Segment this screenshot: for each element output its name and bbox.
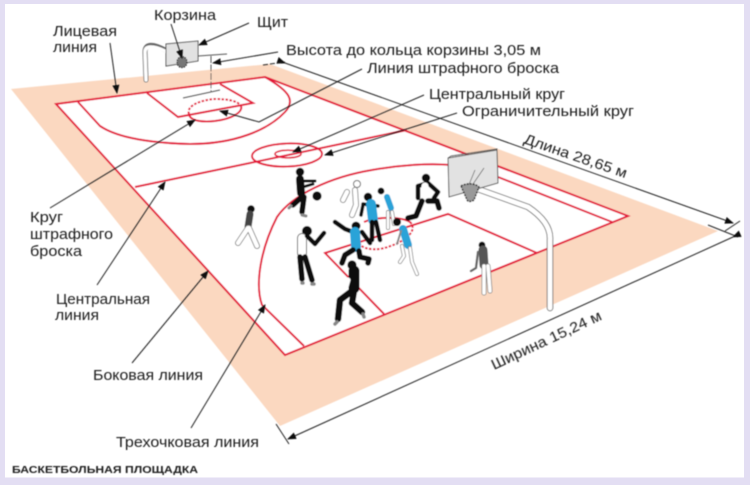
centre line [135,130,407,187]
dimension: length [263,62,740,237]
label: centre line: линия [55,308,99,324]
right net [461,184,479,202]
left restricted key [147,84,253,117]
arrow: backboard [199,23,249,45]
arrow: free throw line [220,69,362,122]
arrow: free throw circle [50,120,195,208]
label: centre line: Центральная [56,292,150,308]
left free throw circle [189,99,241,121]
caption: БАСКЕТБОЛЬНАЯ ПЛОЩАДКА [12,464,198,476]
players [238,168,490,324]
label: free throw circle [30,210,113,260]
left backboard [166,41,198,66]
blue player centre [361,193,380,240]
arrow: basket [171,24,182,58]
centre circle [252,142,322,168]
left pole [145,45,165,80]
blue player right [393,218,417,274]
blue player side [378,188,394,228]
illustration: basketball court [11,41,718,426]
dimension: width [276,237,733,444]
left hoop assembly [145,41,198,80]
label: end line: Лицевая [53,24,117,40]
right pole [475,188,550,308]
right free throw circle [360,218,413,249]
blue player jumping [335,222,370,263]
referee right [471,242,490,293]
label: width: Ширина 15,24 м [489,308,604,374]
arrow: side line [132,271,208,363]
label: hoop height: Высота до кольца корзины 3,05 м [286,43,541,59]
leader lines and arrows [50,23,740,444]
label: restricted circle: Ограничительный круг [462,104,634,120]
arrow: centre line [97,182,165,285]
arrow: three-point line [191,305,265,428]
player white jersey black limbs [300,226,324,284]
label: free throw circle: Круг [30,210,63,226]
court floor and boundary [56,77,628,355]
player with ball [289,168,322,216]
left three-point line [78,77,290,144]
right hoop assembly [448,149,550,308]
arrow: centre circle [293,95,424,152]
white player behind [343,180,360,215]
player bottom black [335,260,364,324]
arrow: hoop height [213,52,278,63]
label: centre line [55,292,150,324]
label: free throw circle: штрафного [30,227,113,243]
restricted circle [275,150,301,158]
label: free throw circle: броска [30,244,83,260]
referee left [238,205,257,246]
label: backboard: Щит [257,15,288,31]
label: centre circle: Центральный круг [429,87,565,103]
arrow: restricted circle [325,113,457,155]
hoop height marker [183,54,227,98]
arrow: end line [110,43,117,93]
left net [177,56,187,68]
label: end line [53,24,117,56]
label: three-point line: Трехочковая линия [116,435,259,451]
right key [325,214,537,314]
label: length: Длина 28,65 м [522,132,629,182]
right three-point line [259,164,612,346]
label: basket: Корзина [154,8,217,24]
label: side line: Боковая линия [93,368,203,384]
label: end line: линия [53,40,97,56]
right backboard [448,150,498,197]
label: free throw line: Линия штрафного броска [367,61,560,77]
black player right [408,174,439,218]
court surround [11,64,718,426]
